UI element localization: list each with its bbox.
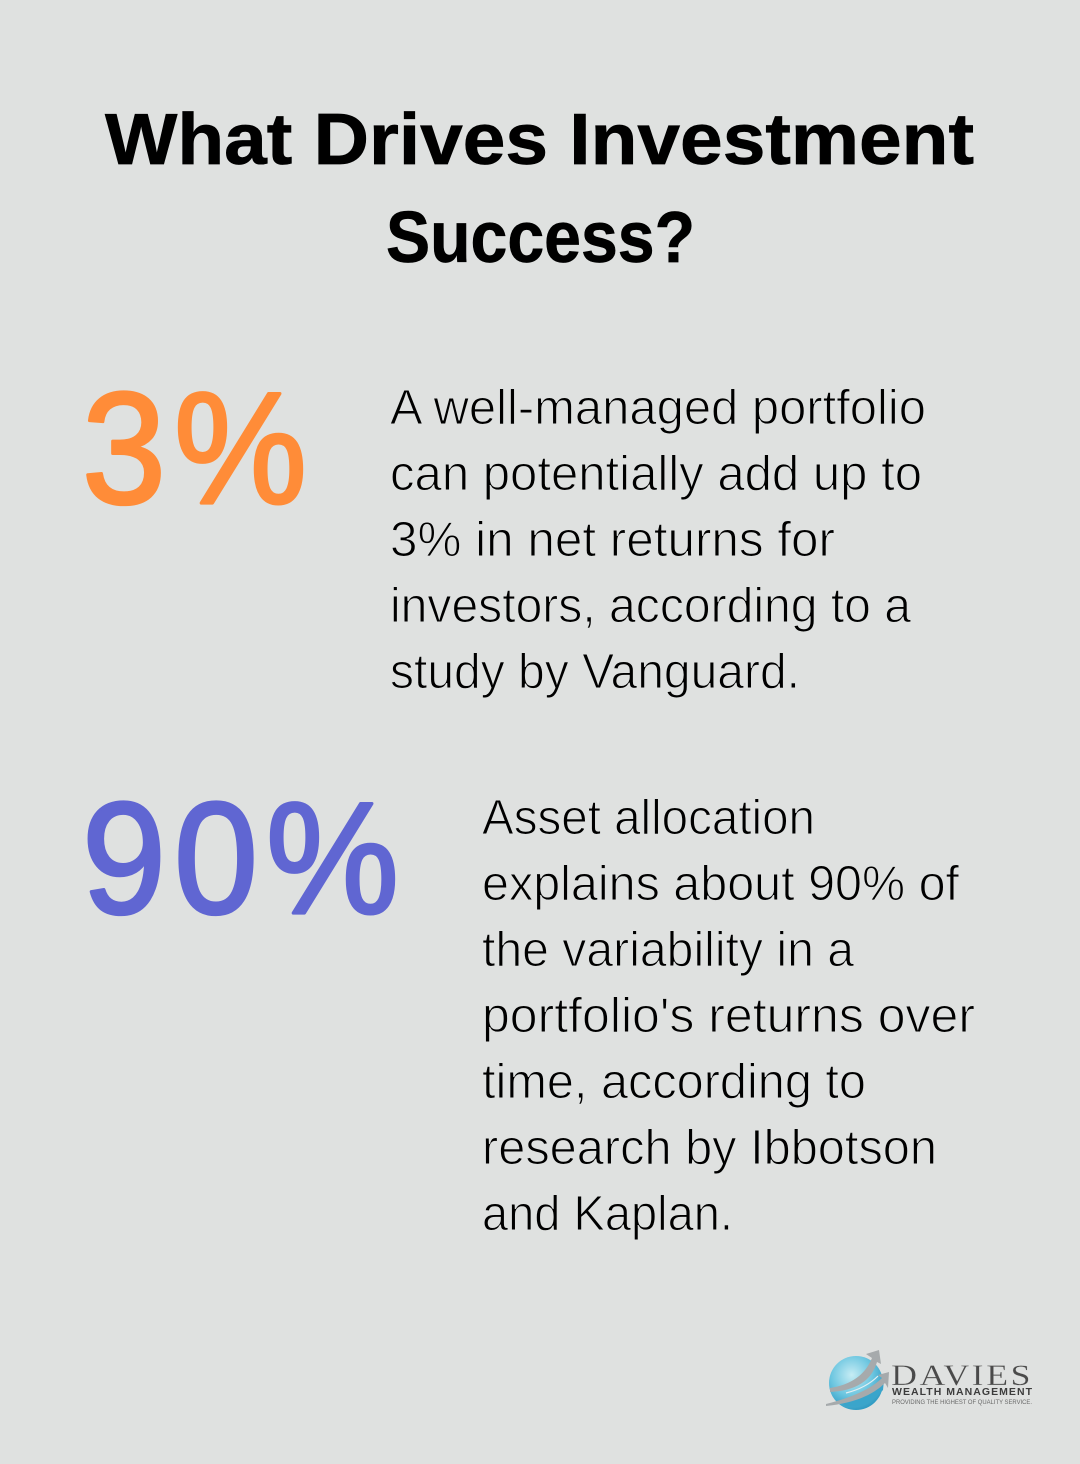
tagline: quality service: PROVIDING THE HIGHEST OF QUALITY SERVICE.: [892, 1399, 1032, 1406]
title: [105, 100, 974, 278]
title: What Drives Investment: [105, 100, 974, 180]
text block: 90% description: and Kaplan.: [482, 1187, 733, 1241]
text block: 3% description: can potentially add up to: [390, 447, 922, 501]
title: Success?: [386, 198, 695, 278]
text block: 3% description: [390, 381, 926, 699]
stat: 90%: 9: [82, 769, 166, 947]
text block: 3% description: study by Vanguard.: [390, 645, 800, 699]
text block: 90% description: [482, 791, 975, 1241]
icon: globe with arrows: [826, 1350, 889, 1410]
stat: 3%: [82, 359, 307, 537]
text block: 90% description: research by Ibbotson: [482, 1121, 937, 1175]
stat: 3%: 3: [82, 359, 166, 537]
logo: Davies Wealth Management: [826, 1350, 1033, 1410]
text block: 3% description: A well-managed portfolio: [390, 381, 926, 435]
wordmark: DAVIES: [891, 1359, 1033, 1392]
text block: 90% description: portfolio's returns over: [482, 989, 975, 1043]
text block: 90% description: explains about 90% of: [482, 857, 959, 911]
stat: 90%: 0: [174, 769, 258, 947]
text block: 3% description: 3% in net returns for: [390, 513, 835, 567]
text block: 90% description: time, according to: [482, 1055, 866, 1109]
stat: 3%: %: [174, 359, 307, 537]
stat: 90%: %: [266, 769, 399, 947]
text block: 90% description: Asset allocation: [482, 791, 815, 845]
stat: 90%: [82, 769, 399, 947]
tagline: wealth management: WEALTH MANAGEMENT: [892, 1386, 1033, 1398]
text block: 90% description: the variability in a: [482, 923, 855, 977]
text block: 3% description: investors, according to a: [390, 579, 912, 633]
